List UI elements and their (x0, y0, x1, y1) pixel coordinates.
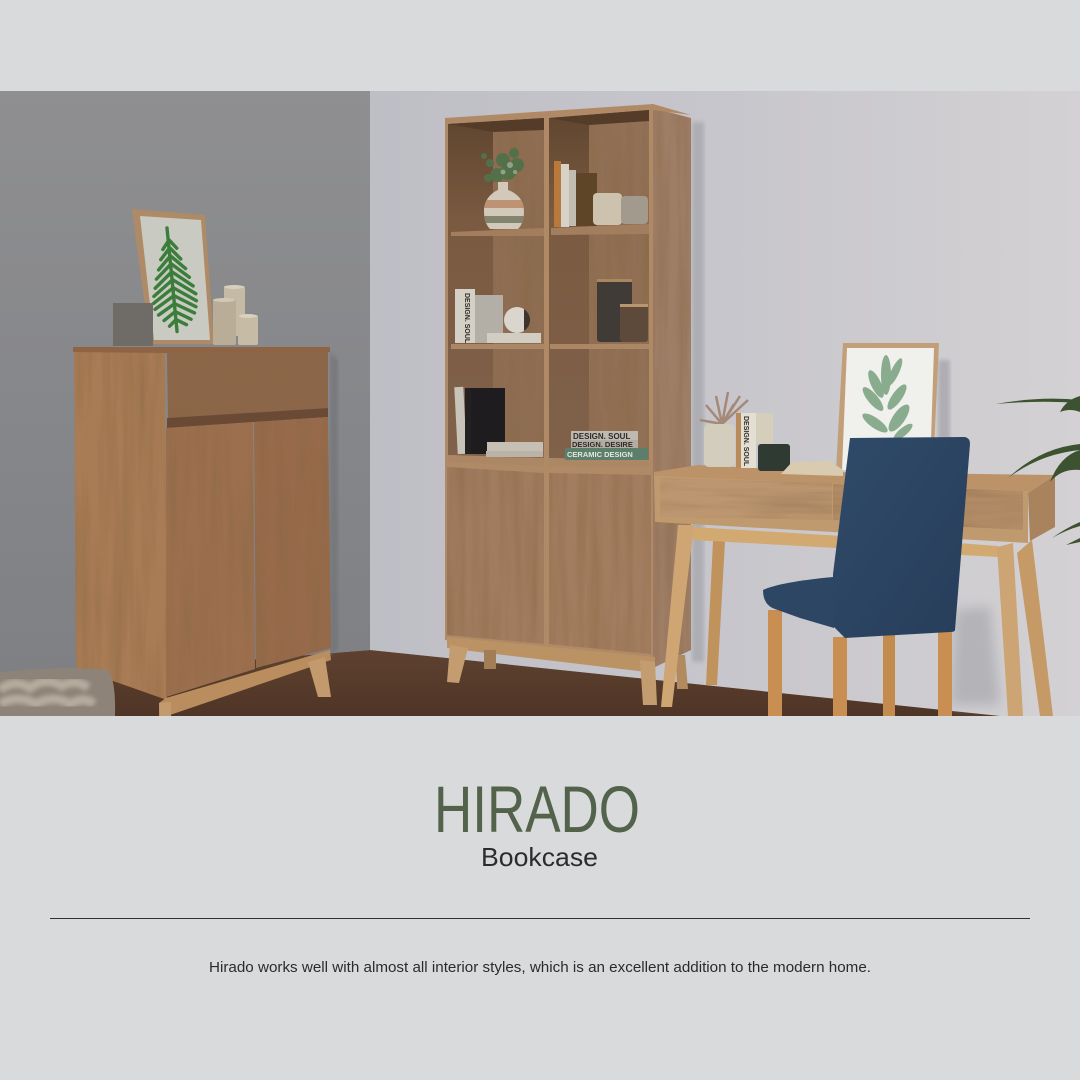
desk chair (763, 437, 970, 716)
front frame (445, 104, 691, 672)
chest side panel (74, 351, 167, 700)
right back panel (589, 121, 649, 460)
desk books (736, 413, 741, 468)
desk print shadow (938, 360, 950, 440)
chest left door (166, 422, 255, 697)
candles (213, 285, 258, 345)
vase with plant (481, 148, 524, 229)
desk top (654, 465, 1055, 493)
back left leg (706, 541, 725, 685)
front left leg (661, 525, 694, 707)
ottoman (0, 668, 115, 716)
frame (132, 209, 214, 344)
shelves (451, 224, 649, 349)
left compartment interior (448, 118, 544, 458)
bookcase shadow (692, 122, 704, 662)
glass jar (758, 444, 790, 471)
chest recess (167, 408, 328, 428)
chest right leg (308, 657, 331, 697)
right compartment interior (549, 110, 649, 460)
description text: Hirado works well with almost all interior styles, which is an excellent addition to the modern home. (209, 960, 871, 976)
fern leaf (147, 226, 199, 333)
print paper (140, 216, 210, 340)
lower right books: DESIGN. DESIRE (572, 440, 633, 449)
potted plant fronds (996, 396, 1080, 545)
side panel (653, 108, 691, 668)
framed leaf print (836, 343, 939, 470)
chest drawer (167, 351, 328, 418)
desk apron (654, 476, 1028, 543)
middle left books: DESIGN. SOUL (463, 293, 470, 344)
chair seat (763, 577, 834, 628)
chest top (73, 347, 330, 353)
right door (549, 473, 651, 654)
left back panel (493, 129, 544, 458)
leaf sprig (860, 355, 915, 443)
chair shadow on wall (950, 606, 1000, 705)
front legs (447, 645, 468, 683)
back leg (676, 655, 688, 689)
lower right books: DESIGN. SOUL (573, 432, 630, 441)
room photo scene (0, 91, 1080, 716)
frame (836, 343, 939, 470)
bookcase (445, 104, 691, 705)
floor (112, 650, 1000, 716)
left wall (0, 91, 370, 680)
chair legs (768, 610, 782, 716)
chest left leg (159, 702, 171, 716)
left drawer (660, 478, 832, 520)
desk accessories: DESIGN. SOUL (742, 416, 749, 467)
desk accessories (700, 392, 843, 476)
left door (447, 467, 544, 644)
chest right door (254, 417, 331, 668)
right drawer (833, 484, 1023, 530)
dark jars (597, 279, 648, 342)
framed fern print (132, 209, 214, 344)
lower right books: CERAMIC DESIGN (567, 450, 633, 459)
title: HIRADO: HIRADO (434, 772, 640, 846)
under rail (693, 527, 998, 557)
base rail (447, 637, 655, 673)
lower left books (454, 387, 543, 457)
open book (781, 461, 843, 476)
chair back (833, 437, 970, 638)
white vase (704, 424, 735, 467)
upper right books (554, 161, 597, 227)
right wall (370, 91, 1080, 716)
chest cabinet (73, 347, 331, 716)
ceramic cups (593, 193, 648, 225)
dried flowers (700, 392, 748, 424)
lower right books (565, 431, 648, 460)
cabinet shadow on wall (330, 352, 338, 655)
print paper (842, 348, 934, 470)
desk side (1028, 475, 1055, 541)
front right leg (997, 543, 1023, 716)
upper shadows (448, 118, 544, 132)
middle left books (455, 289, 541, 344)
chest base (159, 650, 331, 716)
concrete block (113, 303, 153, 346)
divider line (50, 918, 1030, 919)
back right leg (1017, 540, 1053, 716)
desk (654, 465, 1055, 716)
subtitle: Bookcase: Bookcase (481, 842, 598, 872)
